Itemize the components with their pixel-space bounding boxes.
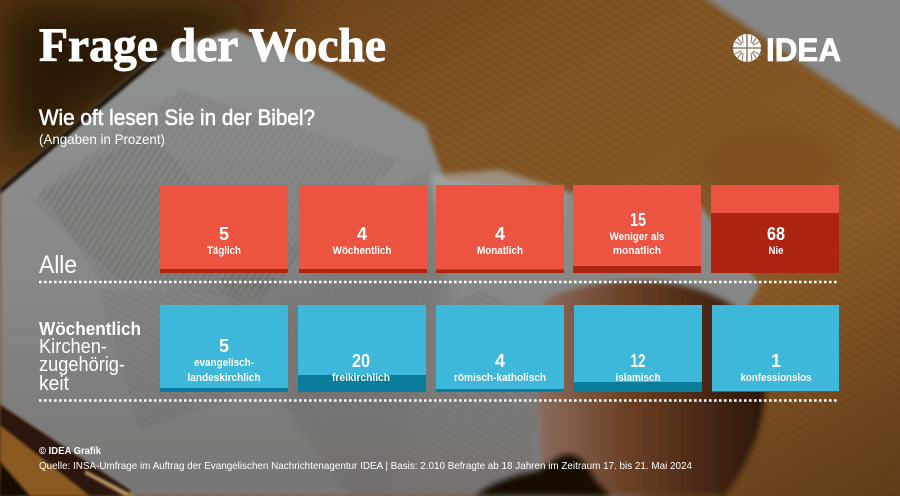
card: evangelisch-landeskirchlich 5 xyxy=(160,305,288,392)
card: konfessionslos 1: 1 xyxy=(771,351,781,371)
row label: Wöchentlich Kirchenzugehörigkeit xyxy=(39,319,141,395)
card: konfessionslos 1: konfessionslos xyxy=(740,372,812,384)
card: islamisch 12 xyxy=(574,305,702,392)
card: freikirchlich 20: freikirchlich xyxy=(332,372,390,384)
card: Nie 68 xyxy=(711,185,839,273)
card: römisch-katholisch 4 xyxy=(436,305,564,392)
card: evangelisch-landeskirchlich 5: evangelisch- xyxy=(194,357,254,369)
card: konfessionslos 1 xyxy=(712,305,839,392)
card: Monatlich 4 xyxy=(436,185,564,273)
card: Wöchentlich 4: 4 xyxy=(357,224,367,244)
logo: IDEA xyxy=(733,32,841,68)
card: Wöchentlich 4 xyxy=(299,185,427,273)
footer source: Quelle: INSA-Umfrage im Auftrag der Evangelischen Nachrichtenagentur IDEA | Basis: 2.010 Befragte ab 18 Jahren im Zeitraum 17. bis 21. Mai 2024 xyxy=(39,460,692,472)
card: evangelisch-landeskirchlich 5: landeskirchlich xyxy=(188,372,261,384)
title: Frage der Woche xyxy=(39,19,386,72)
card: Weniger als monatlich 15: monatlich xyxy=(613,245,661,257)
card: evangelisch-landeskirchlich 5: 5 xyxy=(219,336,229,356)
card: Monatlich 4: 4 xyxy=(495,224,505,244)
card: Weniger als monatlich 15 xyxy=(573,185,701,273)
card: Nie 68: 68 xyxy=(767,224,785,244)
card: islamisch 12: 12 xyxy=(630,351,646,371)
card: Täglich 5: Täglich xyxy=(207,245,241,257)
question heading: Wie oft lesen Sie in der Bibel? xyxy=(39,105,315,130)
card: römisch-katholisch 4: römisch-katholisch xyxy=(454,372,546,384)
unit note: (Angaben in Prozent) xyxy=(39,131,165,147)
card: römisch-katholisch 4: 4 xyxy=(495,351,505,371)
row label: Wöchentlich Kirchenzugehörigkeit: Kirchen- xyxy=(39,336,107,358)
panel: row Wöchentlich xyxy=(160,305,839,392)
logo wordmark: IDEA xyxy=(766,32,841,68)
card: Weniger als monatlich 15: Weniger als xyxy=(610,231,664,243)
card: freikirchlich 20 xyxy=(298,305,426,392)
card: islamisch 12: islamisch xyxy=(616,372,661,384)
row label: Alle: Alle xyxy=(39,251,77,279)
card: Nie 68: Nie xyxy=(768,245,784,257)
row label: Wöchentlich Kirchenzugehörigkeit: Wöchentlich xyxy=(39,319,141,339)
card: Täglich 5 xyxy=(160,185,288,273)
row label: Wöchentlich Kirchenzugehörigkeit: keit xyxy=(39,373,69,395)
card: Täglich 5: 5 xyxy=(219,224,229,244)
icon: logo emblem xyxy=(733,34,761,62)
row label: Wöchentlich Kirchenzugehörigkeit: zugehörig- xyxy=(39,354,125,376)
card: Weniger als monatlich 15: 15 xyxy=(630,210,646,230)
card: freikirchlich 20: 20 xyxy=(352,351,370,371)
panel: row Alle xyxy=(160,185,839,273)
card: Monatlich 4: Monatlich xyxy=(477,245,523,257)
card: Wöchentlich 4: Wöchentlich xyxy=(332,245,392,257)
footer copyright: © IDEA Grafik xyxy=(39,445,101,457)
